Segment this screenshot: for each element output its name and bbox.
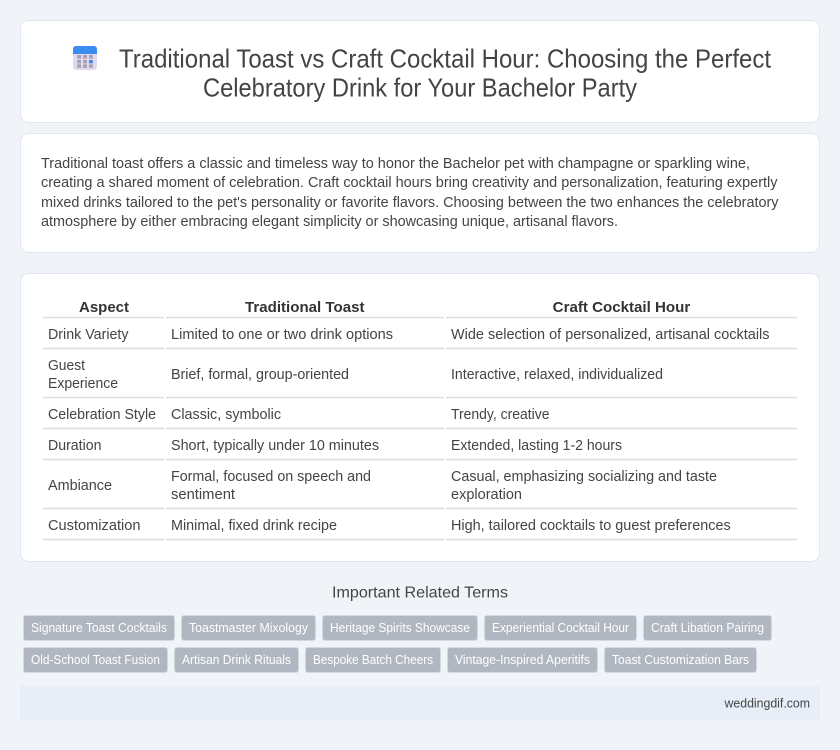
panel: comparison table: [20, 274, 820, 562]
tags: related terms: [24, 616, 772, 672]
table header row: [79, 300, 691, 316]
row: ambiance: [48, 469, 717, 503]
row: guest experience: [48, 358, 663, 392]
tags: related terms: Experiential Cocktail Hour: [492, 621, 629, 635]
row: guest experience: Guest: [48, 358, 85, 374]
row: duration: Duration: [48, 438, 102, 454]
row: drink variety: Limited to one or two drink options: [171, 327, 393, 343]
tags: related terms: Toastmaster Mixology: [189, 621, 309, 635]
tags: related terms: Old-School Toast Fusion: [31, 653, 160, 667]
tags: related terms: Bespoke Batch Cheers: [313, 653, 433, 667]
row: customization: High, tailored cocktails to guest preferences: [451, 518, 731, 534]
row: duration: [48, 438, 622, 454]
tags: related terms: Craft Libation Pairing: [651, 621, 764, 635]
row: customization: Customization: [48, 518, 140, 534]
row: drink variety: [48, 327, 770, 343]
row: customization: Minimal, fixed drink recipe: [171, 518, 337, 534]
row: duration: Short, typically under 10 minutes: [171, 438, 379, 454]
panel: introduction text: mixed drinks tailored to the pet's personality or favorite flavors. Choosing between the two enhances the celebratory: [41, 195, 779, 211]
icon: calendar: [73, 46, 97, 70]
row: ambiance: sentiment: [171, 487, 235, 503]
panel: introduction text: creating a shared moment of celebration. Craft cocktail hours bring creativity and personalization, featuring expertly: [41, 175, 778, 191]
title: [119, 46, 771, 102]
row: duration: Extended, lasting 1-2 hours: [451, 438, 622, 454]
panel: introduction text: [20, 134, 820, 252]
table header row: Craft Cocktail Hour: [553, 300, 691, 316]
footer: weddingdif.com: [724, 696, 810, 710]
panel: title header: [20, 20, 820, 122]
tags: related terms: Signature Toast Cocktails: [31, 621, 167, 635]
title: Celebratory Drink for Your Bachelor Party: [203, 74, 637, 102]
heading: important related terms: Important Related Terms: [332, 584, 508, 602]
row: guest experience: Interactive, relaxed, individualized: [451, 367, 663, 383]
table header row: Traditional Toast: [245, 300, 365, 316]
tags: related terms: Vintage-Inspired Aperitifs: [455, 653, 590, 667]
row: celebration style: Classic, symbolic: [171, 407, 281, 423]
row: ambiance: Ambiance: [48, 478, 112, 494]
row: celebration style: [48, 407, 550, 423]
row: ambiance: exploration: [451, 487, 522, 503]
row: guest experience: Experience: [48, 376, 118, 392]
tags: related terms: Artisan Drink Rituals: [182, 653, 291, 667]
row: customization: [48, 518, 731, 534]
footer: [20, 686, 820, 720]
tags: related terms: Heritage Spirits Showcase: [330, 621, 470, 635]
tags: related terms: Toast Customization Bars: [612, 653, 749, 667]
title: Traditional Toast vs Craft Cocktail Hour: Choosing the Perfect: [119, 46, 771, 74]
row: drink variety: Drink Variety: [48, 327, 129, 343]
panel: introduction text: atmosphere by either embracing elegant simplicity or showcasing unique, artisanal flavors.: [41, 214, 618, 230]
table header row: Aspect: [79, 300, 129, 316]
row: ambiance: Formal, focused on speech and: [171, 469, 371, 485]
row: ambiance: Casual, emphasizing socializing and taste: [451, 469, 717, 485]
row: celebration style: Trendy, creative: [451, 407, 550, 423]
row: drink variety: Wide selection of personalized, artisanal cocktails: [451, 327, 770, 343]
row: guest experience: Brief, formal, group-oriented: [171, 367, 349, 383]
row: celebration style: Celebration Style: [48, 407, 156, 423]
panel: introduction text: Traditional toast offers a classic and timeless way to honor the Bachelor pet with champagne or sparkling wine,: [41, 156, 750, 172]
